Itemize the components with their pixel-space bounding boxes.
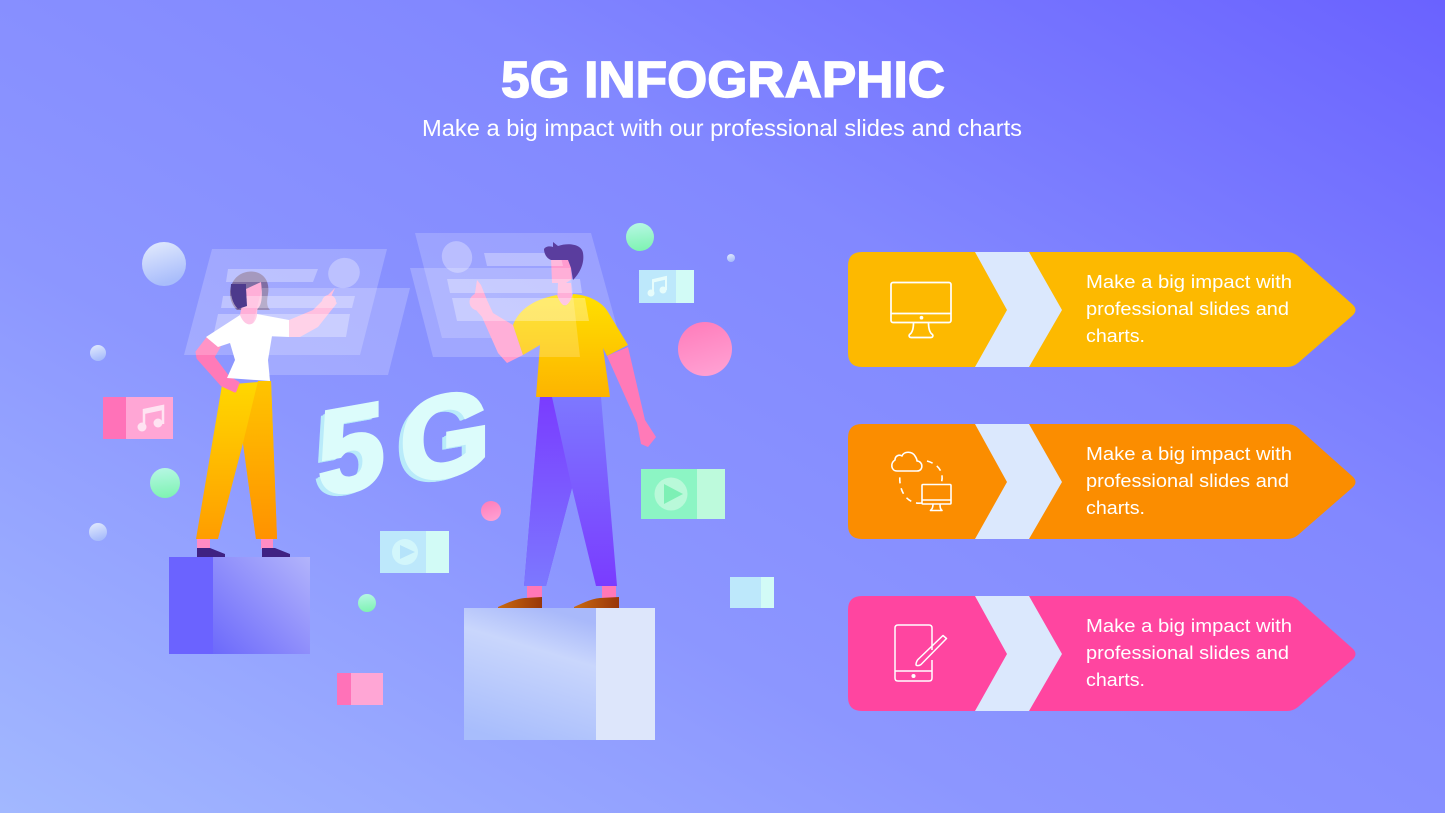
card: green video <box>641 469 725 519</box>
arrow 3: pink <box>848 596 1356 711</box>
ball: small green <box>358 594 376 612</box>
text 3: charts. <box>1086 669 1145 690</box>
ball: green top <box>626 223 654 251</box>
illustration: 5G people scene <box>89 223 774 740</box>
ball: small light lower left <box>89 523 107 541</box>
ball: large pink <box>678 322 732 376</box>
3D letter G: G <box>400 363 490 509</box>
card: small blue <box>730 577 774 608</box>
text 3 <box>1086 615 1292 690</box>
text 2: Make a big impact with <box>1086 443 1292 464</box>
icon: cloud sync to monitor <box>892 452 951 510</box>
woman's dark hair lobe <box>231 284 247 309</box>
text 1 <box>1086 271 1292 346</box>
text 2 <box>1086 443 1292 518</box>
ball: small pink <box>481 501 501 521</box>
card: blue video <box>380 531 449 573</box>
subtitle: Make a big impact with our professional slides and charts <box>422 115 1022 141</box>
card: small pink <box>337 673 383 705</box>
box: man's pedestal <box>464 608 655 740</box>
ball: small light left <box>90 345 106 361</box>
text 1: charts. <box>1086 325 1145 346</box>
panel: woman's hologram <box>184 249 410 375</box>
card: blue music <box>639 270 694 303</box>
panel: man's hologram back sheet <box>415 233 620 338</box>
man <box>470 258 656 608</box>
ball: large light blue <box>142 242 186 286</box>
header <box>422 51 1022 141</box>
arrow 1: yellow <box>848 252 1356 367</box>
text 3: Make a big impact with <box>1086 615 1292 636</box>
3D number 5: 5 <box>318 376 385 522</box>
man's hair <box>544 242 583 280</box>
ball: tiny light <box>727 254 735 262</box>
ball: green left <box>150 468 180 498</box>
box: woman's pedestal <box>169 557 310 654</box>
icon: tablet and stylus <box>895 625 946 681</box>
icon: desktop monitor <box>891 282 951 338</box>
text 2: charts. <box>1086 497 1145 518</box>
title: 5G INFOGRAPHIC <box>501 51 945 108</box>
text 2: professional slides and <box>1086 470 1289 491</box>
arrow 2: orange <box>848 424 1356 539</box>
text 1: Make a big impact with <box>1086 271 1292 292</box>
text 3: professional slides and <box>1086 642 1289 663</box>
woman <box>196 272 337 557</box>
card: pink music <box>103 397 173 439</box>
text 1: professional slides and <box>1086 298 1289 319</box>
panel: man's hologram front sheet <box>410 236 589 357</box>
